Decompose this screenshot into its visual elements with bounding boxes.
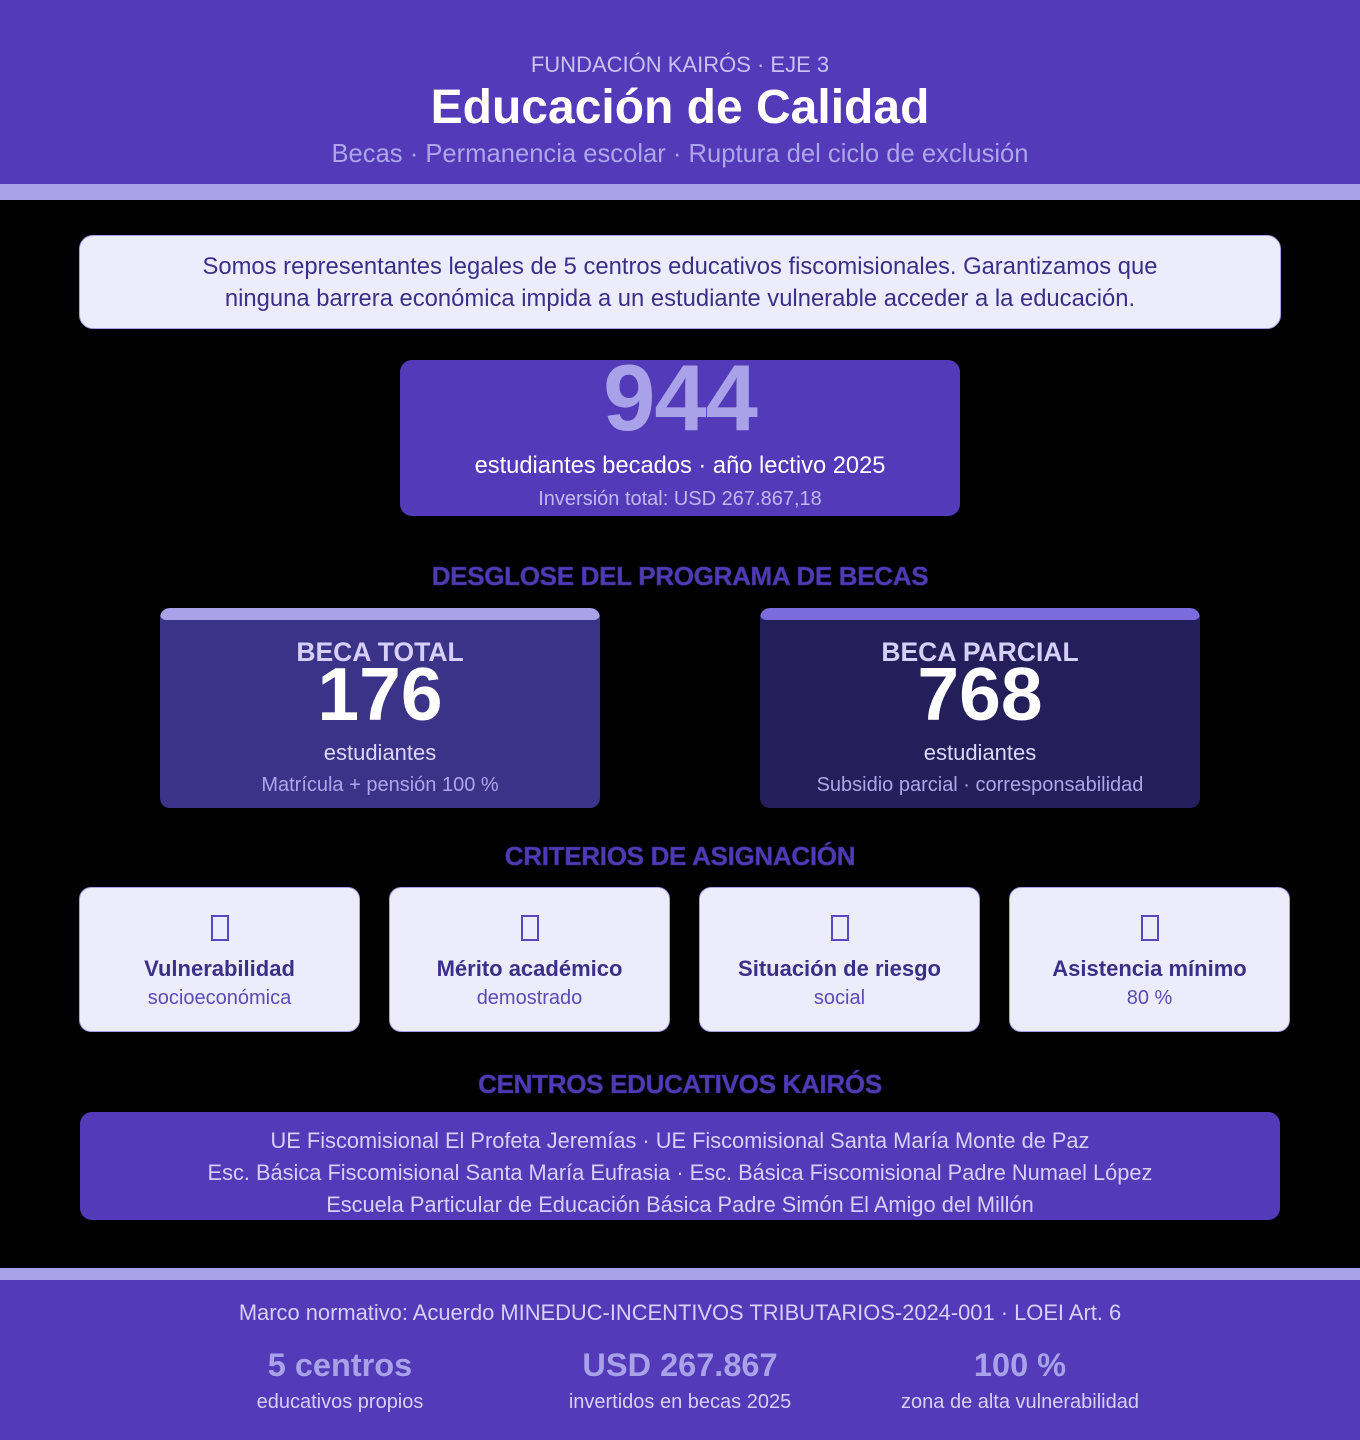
centros list: Escuela Particular de Educación Básica Padre Simón El Amigo del Millón bbox=[326, 1192, 1034, 1217]
intro text box bbox=[79, 235, 1281, 329]
stat: vulnerabilidad bbox=[901, 1347, 1139, 1413]
hero stat 944 bbox=[400, 360, 960, 516]
criterio: asistencia bbox=[1009, 887, 1290, 1032]
card: beca parcial: BECA PARCIAL bbox=[881, 637, 1079, 667]
heading: centros: CENTROS EDUCATIVOS KAIRÓS bbox=[478, 1069, 882, 1099]
stat: centros bbox=[257, 1347, 423, 1413]
criterio: vulnerabilidad: Vulnerabilidad bbox=[144, 956, 295, 981]
heading: criterios: CRITERIOS DE ASIGNACIÓN bbox=[505, 841, 855, 871]
stat: usd: invertidos en becas 2025 bbox=[569, 1391, 791, 1413]
title: Educación de Calidad bbox=[431, 81, 929, 134]
stat: centros: educativos propios bbox=[257, 1391, 423, 1413]
marco normativo: Marco normativo: Acuerdo MINEDUC-INCENTIVOS TRIBUTARIOS-2024-001 · LOEI Art. 6 bbox=[239, 1300, 1121, 1325]
subtitle: Becas · Permanencia escolar · Ruptura del ciclo de exclusión bbox=[331, 140, 1029, 168]
hero stat 944: 944 bbox=[603, 345, 757, 450]
criterio: vulnerabilidad bbox=[79, 887, 360, 1032]
stat: vulnerabilidad: zona de alta vulnerabilidad bbox=[901, 1391, 1139, 1413]
card: beca parcial: 768 bbox=[917, 652, 1043, 736]
header bbox=[0, 0, 1360, 184]
intro text box: Somos representantes legales de 5 centros educativos fiscomisionales. Garantizamos que bbox=[202, 253, 1158, 280]
criterio: riesgo: social bbox=[814, 987, 865, 1009]
card: beca parcial: Subsidio parcial · corresponsabilidad bbox=[817, 774, 1143, 796]
criterio: merito: demostrado bbox=[477, 987, 582, 1009]
intro text box: ninguna barrera económica impida a un estudiante vulnerable acceder a la educación. bbox=[225, 285, 1135, 312]
card: beca total: estudiantes bbox=[324, 740, 436, 765]
card: beca total: 176 bbox=[317, 652, 443, 736]
criterio: riesgo: Situación de riesgo bbox=[738, 956, 941, 981]
centros list: Esc. Básica Fiscomisional Santa María Eufrasia · Esc. Básica Fiscomisional Padre Numael López bbox=[208, 1160, 1152, 1185]
card: beca total bbox=[160, 608, 600, 808]
criterio: merito: Mérito académico bbox=[437, 956, 622, 981]
card: beca total: BECA TOTAL bbox=[296, 637, 464, 667]
criterio: merito bbox=[389, 887, 670, 1032]
centros list bbox=[80, 1112, 1280, 1220]
stat: usd: USD 267.867 bbox=[582, 1347, 778, 1383]
kicker: FUNDACIÓN KAIRÓS · EJE 3 bbox=[531, 52, 829, 77]
hero stat 944: estudiantes becados · año lectivo 2025 bbox=[475, 453, 885, 479]
stat: vulnerabilidad: 100 % bbox=[974, 1347, 1066, 1383]
stat: usd bbox=[569, 1347, 791, 1413]
card: beca parcial: estudiantes bbox=[924, 740, 1036, 765]
criterio: asistencia: Asistencia mínimo bbox=[1052, 956, 1247, 981]
stat: centros: 5 centros bbox=[268, 1347, 412, 1383]
card: beca total: Matrícula + pensión 100 % bbox=[261, 774, 499, 796]
criterio: riesgo bbox=[699, 887, 980, 1032]
criterio: asistencia: 80 % bbox=[1127, 987, 1172, 1009]
centros list: UE Fiscomisional El Profeta Jeremías · UE Fiscomisional Santa María Monte de Paz bbox=[271, 1128, 1089, 1153]
criterio: vulnerabilidad: socioeconómica bbox=[148, 987, 291, 1009]
footer bbox=[0, 1280, 1360, 1440]
heading: desglose: DESGLOSE DEL PROGRAMA DE BECAS bbox=[432, 561, 928, 591]
hero stat 944: Inversión total: USD 267.867,18 bbox=[538, 488, 822, 510]
card: beca parcial bbox=[760, 608, 1200, 808]
